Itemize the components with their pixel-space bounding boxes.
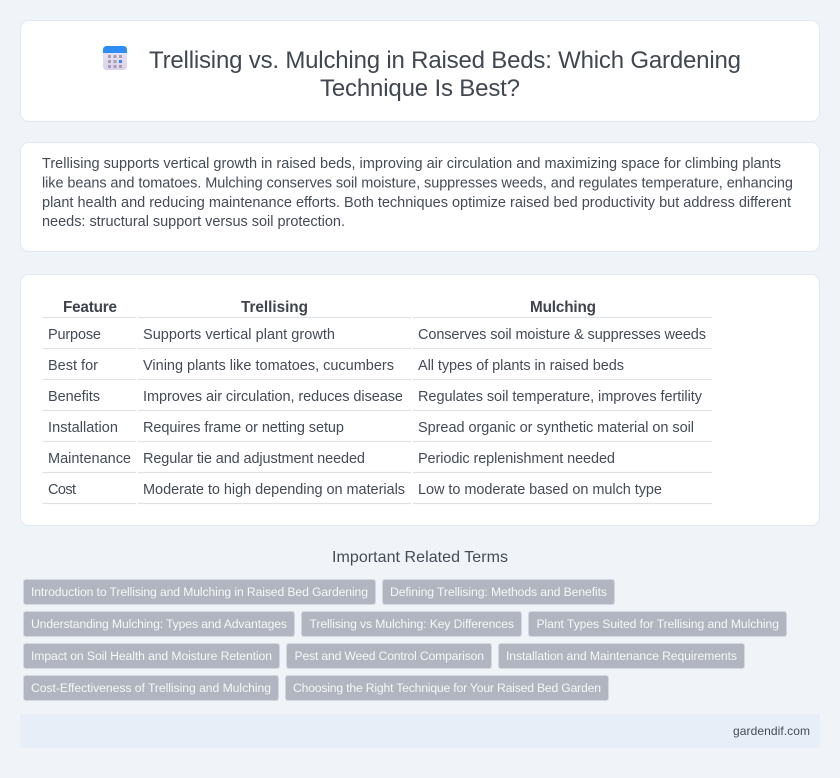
footer — [20, 714, 820, 748]
tag: Pest and Weed Control Comparison — [294, 649, 484, 663]
row: cost: Low to moderate based on mulch type — [418, 482, 662, 498]
row: installation — [48, 420, 694, 436]
text block: summary: Trellising supports vertical growth in raised beds, improving air circulation and maximizing space for climbing plants — [42, 156, 781, 172]
icon: calendar — [103, 46, 127, 70]
row: cost: Moderate to high depending on materials — [143, 482, 405, 498]
row: cost: Cost — [48, 482, 76, 498]
text block: summary: needs: structural support versus soil protection. — [42, 214, 345, 230]
row: installation: Installation — [48, 420, 118, 436]
tag — [286, 676, 608, 700]
tag — [24, 580, 376, 604]
tag: Cost-Effectiveness of Trellising and Mulching — [31, 681, 271, 695]
row: best for: Vining plants like tomatoes, cucumbers — [143, 358, 394, 374]
text block: summary — [42, 156, 793, 230]
tag: Introduction to Trellising and Mulching in Raised Bed Gardening — [31, 585, 368, 599]
row: benefits: Benefits — [48, 389, 100, 405]
tag — [382, 580, 614, 604]
row: benefits — [48, 389, 703, 405]
row: maintenance: Regular tie and adjustment needed — [143, 451, 365, 467]
tag — [24, 644, 280, 668]
tags: related terms — [24, 580, 786, 700]
text block: summary: like beans and tomatoes. Mulching conserves soil moisture, suppresses weeds, and regulates temperature, enhancing — [42, 176, 793, 192]
row: best for — [48, 358, 624, 374]
panel: summary paragraph — [20, 142, 820, 252]
row: purpose: Purpose — [48, 327, 101, 343]
row: benefits: Regulates soil temperature, improves fertility — [418, 389, 703, 405]
panel: title header — [20, 20, 820, 122]
table header: Mulching — [530, 299, 596, 316]
title: Technique Is Best? — [320, 75, 520, 102]
table header: Trellising — [241, 299, 308, 316]
row: installation: Spread organic or synthetic material on soil — [418, 420, 694, 436]
table header: Feature — [63, 299, 117, 316]
row: maintenance — [48, 451, 615, 467]
tag — [24, 612, 294, 636]
tag: Trellising vs Mulching: Key Differences — [310, 617, 514, 631]
row: purpose: Supports vertical plant growth — [143, 327, 335, 343]
tag — [498, 644, 744, 668]
row: cost — [48, 482, 662, 498]
tag: Plant Types Suited for Trellising and Mulching — [536, 617, 779, 631]
text block: summary: plant health and reducing maintenance efforts. Both techniques optimize raised bed productivity but address different — [42, 195, 791, 211]
tag — [24, 676, 278, 700]
tag: Understanding Mulching: Types and Advantages — [31, 617, 287, 631]
row: maintenance: Maintenance — [48, 451, 131, 467]
footer source text: gardendif.com — [733, 724, 810, 738]
table header — [63, 299, 596, 316]
row: installation: Requires frame or netting setup — [143, 420, 344, 436]
heading: important related terms: Important Related Terms — [332, 549, 508, 566]
tag: Choosing the Right Technique for Your Raised Bed Garden — [293, 681, 601, 695]
row: maintenance: Periodic replenishment needed — [418, 451, 615, 467]
tag — [286, 644, 492, 668]
title: Trellising vs. Mulching in Raised Beds: Which Gardening — [149, 47, 741, 74]
tag — [528, 612, 786, 636]
tag: Impact on Soil Health and Moisture Retention — [31, 649, 272, 663]
tag: Installation and Maintenance Requirements — [506, 649, 737, 663]
row: best for: Best for — [48, 358, 98, 374]
panel: comparison table — [20, 274, 820, 526]
row: purpose: Conserves soil moisture & suppresses weeds — [418, 327, 706, 343]
tag — [302, 612, 522, 636]
row: benefits: Improves air circulation, reduces disease — [143, 389, 403, 405]
title — [149, 47, 741, 102]
row: purpose — [48, 327, 706, 343]
tag: Defining Trellising: Methods and Benefits — [390, 585, 607, 599]
row: best for: All types of plants in raised beds — [418, 358, 624, 374]
